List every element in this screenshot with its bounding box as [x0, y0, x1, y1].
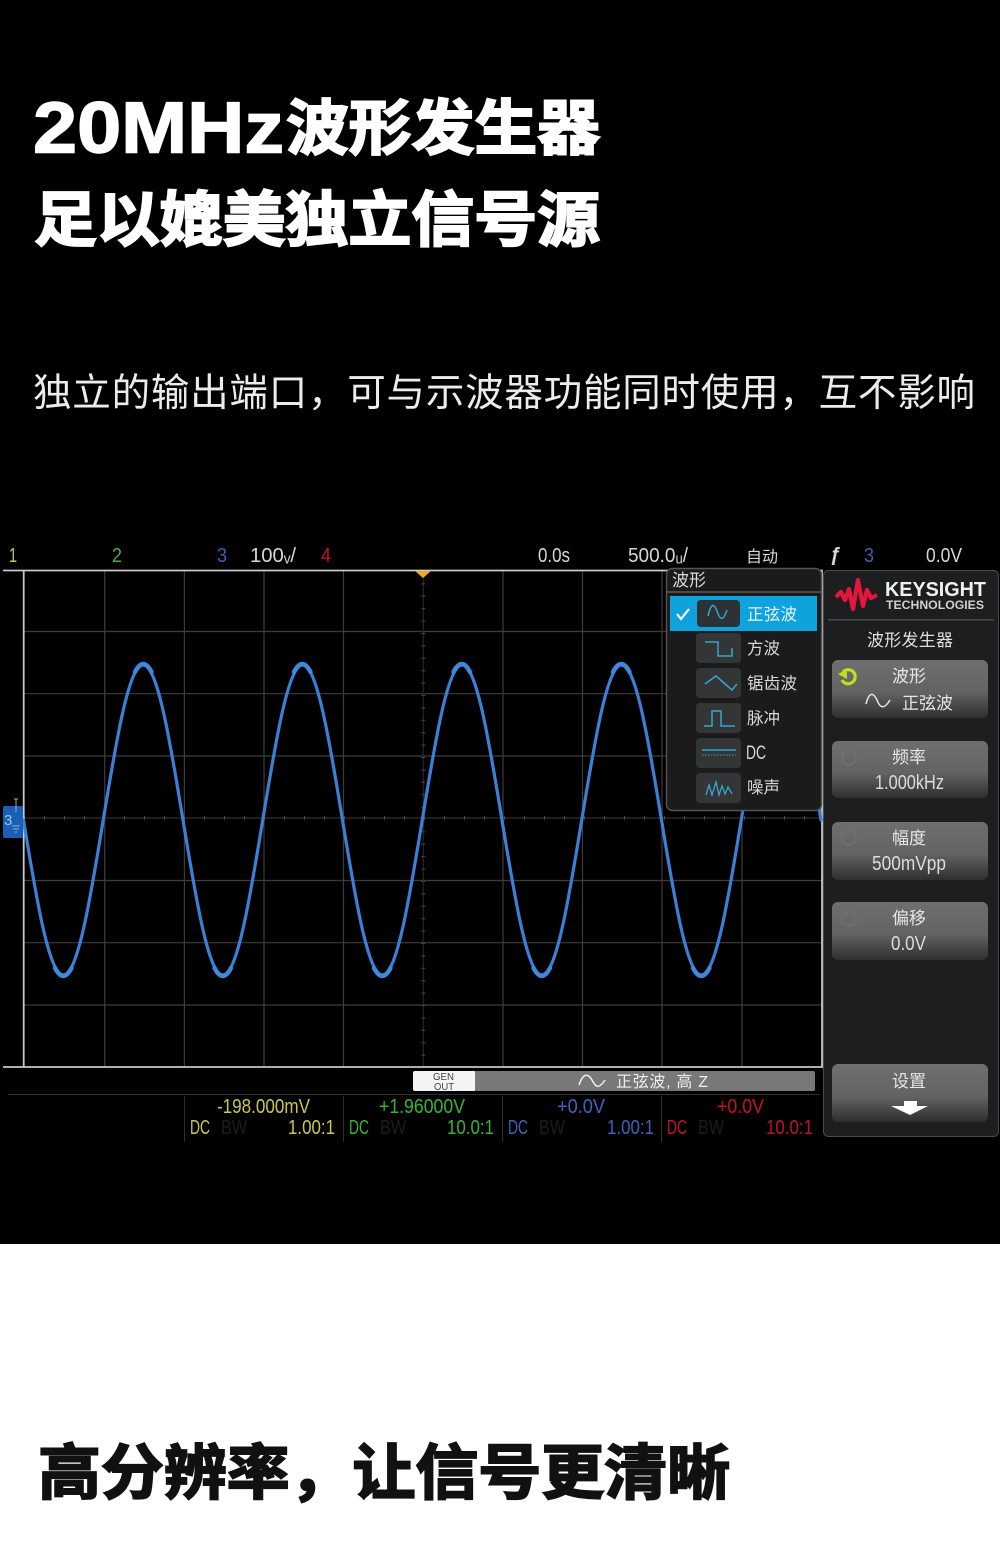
- channel 4 readout: BW: [698, 1117, 724, 1139]
- channel 4 readout: 10.0:1: [766, 1117, 813, 1139]
- channel 2 readout: 10.0:1: [447, 1117, 494, 1139]
- heading: high resolution: 高分辨率，让信号更清晰: [38, 1440, 730, 1507]
- Keysight logo: TECHNOLOGIES: [886, 598, 984, 612]
- selected row: sine wave: 正弦波: [747, 605, 797, 624]
- channel 4 readout: [667, 1096, 813, 1139]
- softkey: amplitude: 500mVpp: [872, 853, 946, 875]
- channel 2 readout: BW: [380, 1117, 406, 1139]
- heading: waveform generator: [33, 88, 600, 254]
- row: square wave: [696, 633, 780, 663]
- softkey: frequency: 频率: [892, 748, 926, 767]
- heading: waveform generator: 20MHz: [33, 88, 284, 168]
- softkey: offset: 偏移: [892, 909, 926, 928]
- row: sawtooth wave: 锯齿波: [747, 674, 797, 693]
- softkey: settings: [832, 1064, 988, 1122]
- graticule grid: [24, 571, 822, 1067]
- channel readouts: [8, 1094, 820, 1142]
- channel 1 readout: [190, 1096, 335, 1139]
- GEN OUT badge: OUT: [434, 1082, 454, 1093]
- heading: waveform generator: 足以媲美独立信号源: [34, 187, 600, 254]
- panel heading: 波形发生器: [867, 631, 953, 650]
- subtitle text: 独立的输出端口，可与示波器功能同时使用，互不影响: [33, 372, 975, 415]
- top status bar: 3: [864, 545, 874, 567]
- selected row: sine wave: [670, 596, 817, 631]
- channel 1 readout: BW: [221, 1117, 247, 1139]
- channel 2 readout: DC: [349, 1117, 369, 1139]
- top status bar: 100ᵥ/: [250, 545, 296, 567]
- GEN OUT badge: [413, 1071, 476, 1093]
- channel 2 readout: +1.96000V: [379, 1096, 466, 1118]
- row: sawtooth wave: [696, 668, 797, 698]
- top status bar: 0.0s: [538, 545, 570, 567]
- channel 2 readout: [349, 1096, 494, 1139]
- row: noise: 噪声: [747, 778, 780, 797]
- channel 3 readout: DC: [508, 1117, 528, 1139]
- softkey: amplitude: [832, 822, 988, 880]
- channel 1 readout: 1.00:1: [288, 1117, 335, 1139]
- top status bar: ƒ: [830, 544, 841, 566]
- channel 4 readout: +0.0V: [717, 1096, 765, 1118]
- channel 3 readout: [508, 1096, 654, 1139]
- channel 1 readout: DC: [190, 1117, 210, 1139]
- softkey: amplitude: 幅度: [892, 829, 926, 848]
- GEN OUT badge: GEN: [433, 1072, 454, 1083]
- softkey: waveform: 正弦波: [902, 694, 953, 713]
- generator status bar: [413, 1071, 815, 1093]
- row: pulse: [696, 703, 780, 733]
- top status bar: 500.0ᵤ/: [628, 545, 688, 567]
- sine wave trace, channel 3: [24, 664, 821, 976]
- top status bar: 0.0V: [926, 545, 963, 567]
- top status bar: 1: [9, 545, 17, 567]
- row: noise: [696, 773, 780, 803]
- Keysight logo: [836, 579, 986, 612]
- channel 3 readout: 1.00:1: [607, 1117, 654, 1139]
- row: DC: [696, 738, 766, 768]
- top status bar: 3: [217, 545, 227, 567]
- top status bar: [9, 544, 963, 567]
- trigger position marker: [415, 571, 431, 578]
- oscilloscope screen: [3, 544, 963, 1067]
- softkey: offset: 0.0V: [891, 933, 927, 955]
- softkey: frequency: [832, 741, 988, 798]
- top status bar: 自动: [746, 548, 778, 566]
- heading: waveform generator: 波形发生器: [286, 96, 600, 162]
- popup menu: waveform selection: [666, 568, 822, 810]
- channel 3 readout: BW: [539, 1117, 565, 1139]
- channel 4 readout: DC: [667, 1117, 687, 1139]
- Keysight logo: KEYSIGHT: [885, 579, 986, 601]
- softkey: offset: [832, 902, 988, 960]
- top status bar: 4: [321, 545, 331, 567]
- generator status bar: 正弦波, 高 Z: [616, 1073, 708, 1091]
- softkey: waveform: [832, 660, 988, 718]
- softkey: waveform: 波形: [892, 667, 926, 686]
- row: pulse: 脉冲: [747, 709, 780, 728]
- channel 3 readout: +0.0V: [557, 1096, 606, 1118]
- channel 3 ground marker: [3, 799, 23, 838]
- screen frame: [3, 570, 822, 1067]
- softkey panel: [824, 570, 998, 1136]
- channel 3 ground marker: 3: [4, 812, 12, 829]
- popup title: 波形: [672, 571, 706, 590]
- row: DC: DC: [746, 743, 766, 764]
- channel 1 readout: -198.000mV: [217, 1096, 311, 1118]
- row: square wave: 方波: [747, 639, 780, 658]
- softkey: frequency: 1.000kHz: [875, 772, 944, 794]
- softkey: settings: 设置: [892, 1072, 926, 1091]
- top status bar: 2: [112, 545, 122, 567]
